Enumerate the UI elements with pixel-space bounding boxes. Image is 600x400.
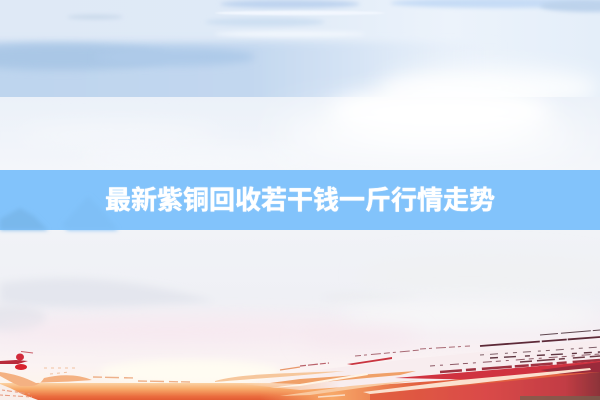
sunset ground xyxy=(0,360,600,400)
banner mountains xyxy=(0,196,118,230)
clouds: blue streaks xyxy=(0,0,600,97)
lower clouds and glow xyxy=(0,280,262,378)
red ink splash xyxy=(0,352,33,370)
sky upper band xyxy=(0,0,600,97)
mid sky with sun glow xyxy=(0,86,600,170)
title: 最新紫铜回收若干钱一斤行情走势 xyxy=(105,185,495,215)
lower background xyxy=(0,230,600,400)
title banner background xyxy=(0,170,600,230)
right brush strokes xyxy=(215,330,600,397)
left orange and white splashes xyxy=(0,368,190,400)
